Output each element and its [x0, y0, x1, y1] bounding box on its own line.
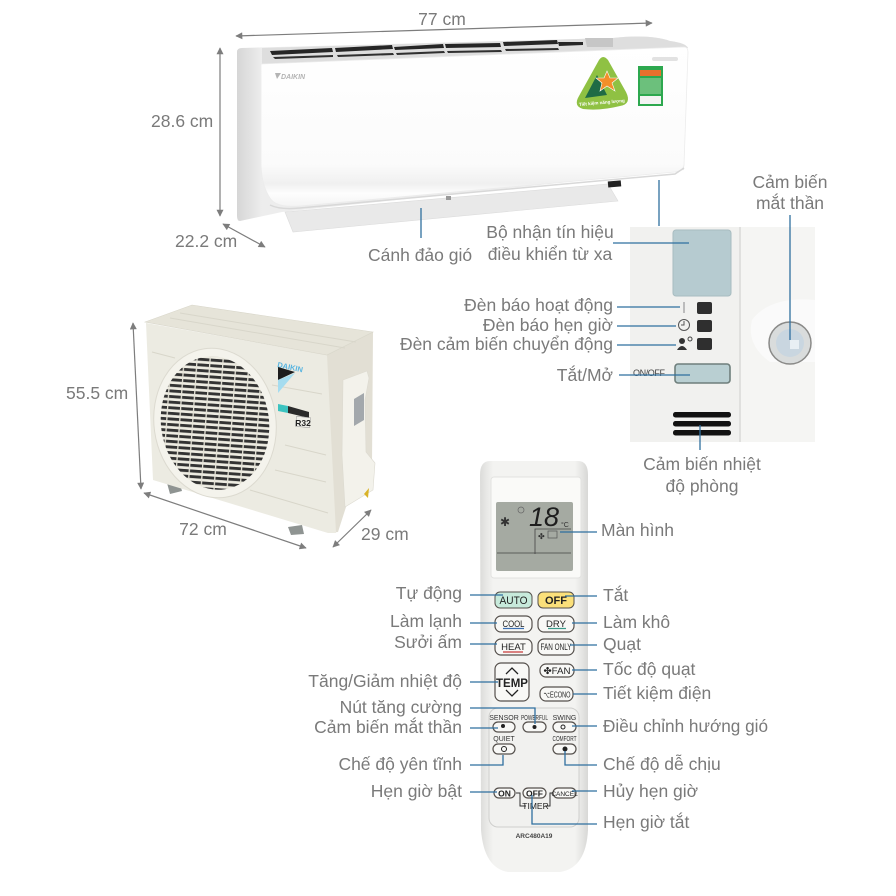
callout: timer off: Hẹn giờ tắt	[603, 811, 690, 832]
temperature sensor vents	[673, 412, 731, 436]
dimension: height 28.6 cm: 28.6 cm	[151, 111, 213, 131]
button: heat: HEAT	[501, 642, 526, 653]
side spec plate	[354, 393, 364, 426]
comfort button	[552, 736, 577, 754]
callout: cool	[390, 611, 497, 631]
front face	[146, 323, 336, 533]
button: off	[538, 592, 574, 608]
callout: room temperature sensor: Cảm biến nhiệt	[643, 454, 761, 474]
inverter badge	[278, 404, 309, 418]
indoor unit	[237, 37, 688, 232]
timer on button: ON	[498, 788, 511, 798]
indicator lights	[697, 302, 712, 350]
callout: remote receiver: điều khiển từ xa	[488, 244, 613, 264]
button: fan only: FAN ONLY	[540, 642, 572, 653]
callout: cool: Làm lạnh	[390, 611, 462, 631]
callout: off	[565, 584, 628, 605]
feet	[167, 481, 304, 535]
callout: powerful	[340, 697, 535, 724]
dimension: height 55.5 cm	[66, 323, 141, 489]
callout: on/off	[557, 364, 690, 385]
callout: timer on: Hẹn giờ bật	[371, 781, 462, 801]
callout: remote receiver	[486, 222, 689, 264]
button: cool: COOL	[502, 619, 524, 630]
callout: room temperature sensor: độ phòng	[666, 476, 738, 496]
button: fan only	[538, 639, 574, 655]
receiver window	[673, 230, 731, 296]
dimension: depth 22.2 cm: 22.2 cm	[175, 231, 237, 251]
motion sensor	[751, 299, 815, 364]
callout: fan speed: Tốc độ quạt	[603, 659, 696, 679]
front ribs	[152, 352, 328, 513]
lcd screen: ✤	[538, 532, 545, 541]
timer cancel button: CANCEL	[551, 791, 578, 798]
brand text on panel	[275, 73, 306, 81]
refrigerant label: R32	[295, 418, 311, 428]
dimension: depth 22.2 cm	[175, 224, 265, 251]
swing button	[553, 715, 576, 732]
button: auto: AUTO	[500, 595, 528, 607]
dimension: width 72 cm	[144, 493, 306, 548]
button: dry	[538, 616, 574, 632]
dimension: height 55.5 cm: 55.5 cm	[66, 383, 128, 403]
lcd frame	[491, 477, 581, 578]
dimension: depth 29 cm	[333, 510, 409, 547]
button: cool	[495, 616, 532, 632]
dimension: depth 29 cm: 29 cm	[361, 524, 409, 544]
callout: screen	[560, 520, 674, 540]
callout: comfort: Chế độ dễ chịu	[603, 753, 721, 774]
button: temp	[495, 663, 529, 701]
callout: cancel timer: Hủy hẹn giờ	[603, 781, 698, 801]
brand logo	[277, 360, 304, 393]
detail divider	[739, 227, 741, 442]
side face	[327, 332, 373, 533]
timer on button	[494, 788, 515, 798]
callout: off: Tắt	[603, 584, 628, 605]
lcd screen	[496, 502, 573, 571]
top cover strip	[262, 37, 688, 64]
valve cover	[342, 371, 375, 507]
brand logo: DAIKIN	[519, 487, 557, 498]
detail background	[630, 227, 815, 442]
unit body	[237, 37, 688, 221]
quiet button: QUIET	[493, 736, 515, 743]
callout: on/off: Tắt/Mở	[557, 364, 613, 385]
powerful button: POWERFUL	[521, 715, 548, 722]
brand logo: DAIKIN	[277, 360, 304, 374]
model number: ARC480A19	[516, 833, 553, 840]
callout: fan only: Quạt	[603, 634, 641, 654]
lower button panel	[489, 708, 579, 827]
callout: motion light: Đèn cảm biến chuyển động	[400, 334, 613, 354]
callout: econo: Tiết kiệm điện	[603, 683, 711, 703]
top ribs	[170, 313, 356, 348]
energy rating label	[638, 66, 663, 106]
top face	[145, 305, 373, 355]
outdoor unit	[144, 305, 375, 535]
energy star label	[577, 57, 628, 110]
comfort button: COMFORT	[552, 736, 577, 743]
callout: operation light: Đèn báo hoạt động	[464, 295, 613, 315]
dimension: width 77 cm	[236, 9, 652, 36]
callout: auto	[396, 583, 503, 603]
signal receiver slot	[608, 180, 621, 188]
air vents	[270, 38, 613, 59]
on/off label: ON/OFF	[633, 368, 665, 378]
callout: heat	[394, 632, 497, 652]
on/off button	[675, 364, 730, 383]
brand text on panel: DAIKIN	[281, 74, 306, 81]
callout: screen: Màn hình	[601, 520, 674, 540]
warning triangle	[364, 488, 369, 498]
callout: swing: Điều chỉnh hướng gió	[603, 716, 768, 736]
button: heat	[495, 639, 532, 655]
callout: receiver vertical line	[658, 180, 660, 226]
callout: louver	[368, 208, 472, 265]
callout: motion sensor	[753, 172, 827, 340]
sensor button	[489, 715, 519, 732]
callout: comfort	[565, 751, 721, 774]
sensor button: SENSOR	[489, 715, 519, 722]
fan grille	[160, 356, 270, 490]
callout: room temperature sensor	[643, 425, 761, 496]
button: econo: ⌥ECONO	[544, 690, 570, 700]
callout: timer light: Đèn báo hẹn giờ	[483, 315, 613, 335]
callout: temperature: Tăng/Giảm nhiệt độ	[308, 671, 462, 691]
button: auto	[495, 592, 532, 608]
energy star label: Tiết kiệm năng lượng	[579, 97, 625, 107]
front panel	[261, 47, 688, 206]
lcd screen: ✱	[500, 515, 510, 529]
swing button: SWING	[553, 715, 576, 722]
callout: quiet: Chế độ yên tĩnh	[338, 754, 462, 774]
callout: motion sensor: Cảm biến	[753, 172, 827, 192]
fan grille ring	[144, 340, 286, 506]
callout: dry: Làm khô	[603, 612, 670, 632]
powerful button	[521, 715, 548, 732]
callout: dry	[572, 612, 670, 632]
indicator icons	[677, 302, 692, 350]
small inverter badge	[652, 57, 678, 61]
callout: powerful: Nút tăng cường	[340, 697, 462, 717]
remote control	[480, 461, 588, 872]
remote body	[480, 461, 588, 872]
callout: heat: Sưởi ấm	[394, 632, 462, 652]
button: dry: DRY	[546, 619, 567, 630]
callout: motion sensor: mắt thần	[756, 192, 824, 213]
callout: remote receiver: Bộ nhận tín hiệu	[486, 222, 614, 242]
dimension: width 72 cm: 72 cm	[179, 519, 227, 539]
callout: fan only	[570, 634, 641, 654]
panel lip	[270, 168, 684, 209]
timer bracket: TIMER	[522, 801, 549, 811]
quiet button	[493, 736, 515, 754]
right detail section	[741, 227, 815, 442]
callout: louver: Cánh đảo gió	[368, 245, 472, 265]
button: fan: ✤FAN	[544, 666, 571, 677]
timer bracket	[516, 793, 553, 811]
lcd screen: °C	[561, 521, 569, 529]
button: econo	[540, 687, 573, 701]
timer cancel button	[551, 788, 578, 798]
lcd screen: 18	[529, 502, 559, 532]
louver hinge	[446, 196, 451, 200]
button: fan	[540, 664, 574, 677]
panel: control detail	[630, 227, 815, 442]
button: temp: TEMP	[496, 678, 528, 690]
callout: auto: Tự động	[396, 583, 462, 603]
dimension: width 77 cm: 77 cm	[418, 9, 466, 29]
button: off: OFF	[545, 595, 567, 607]
callout: timer off	[532, 795, 690, 832]
louver	[285, 184, 618, 232]
timer off button: OFF	[526, 788, 543, 798]
callout: sensor: Cảm biến mắt thần	[314, 716, 462, 737]
